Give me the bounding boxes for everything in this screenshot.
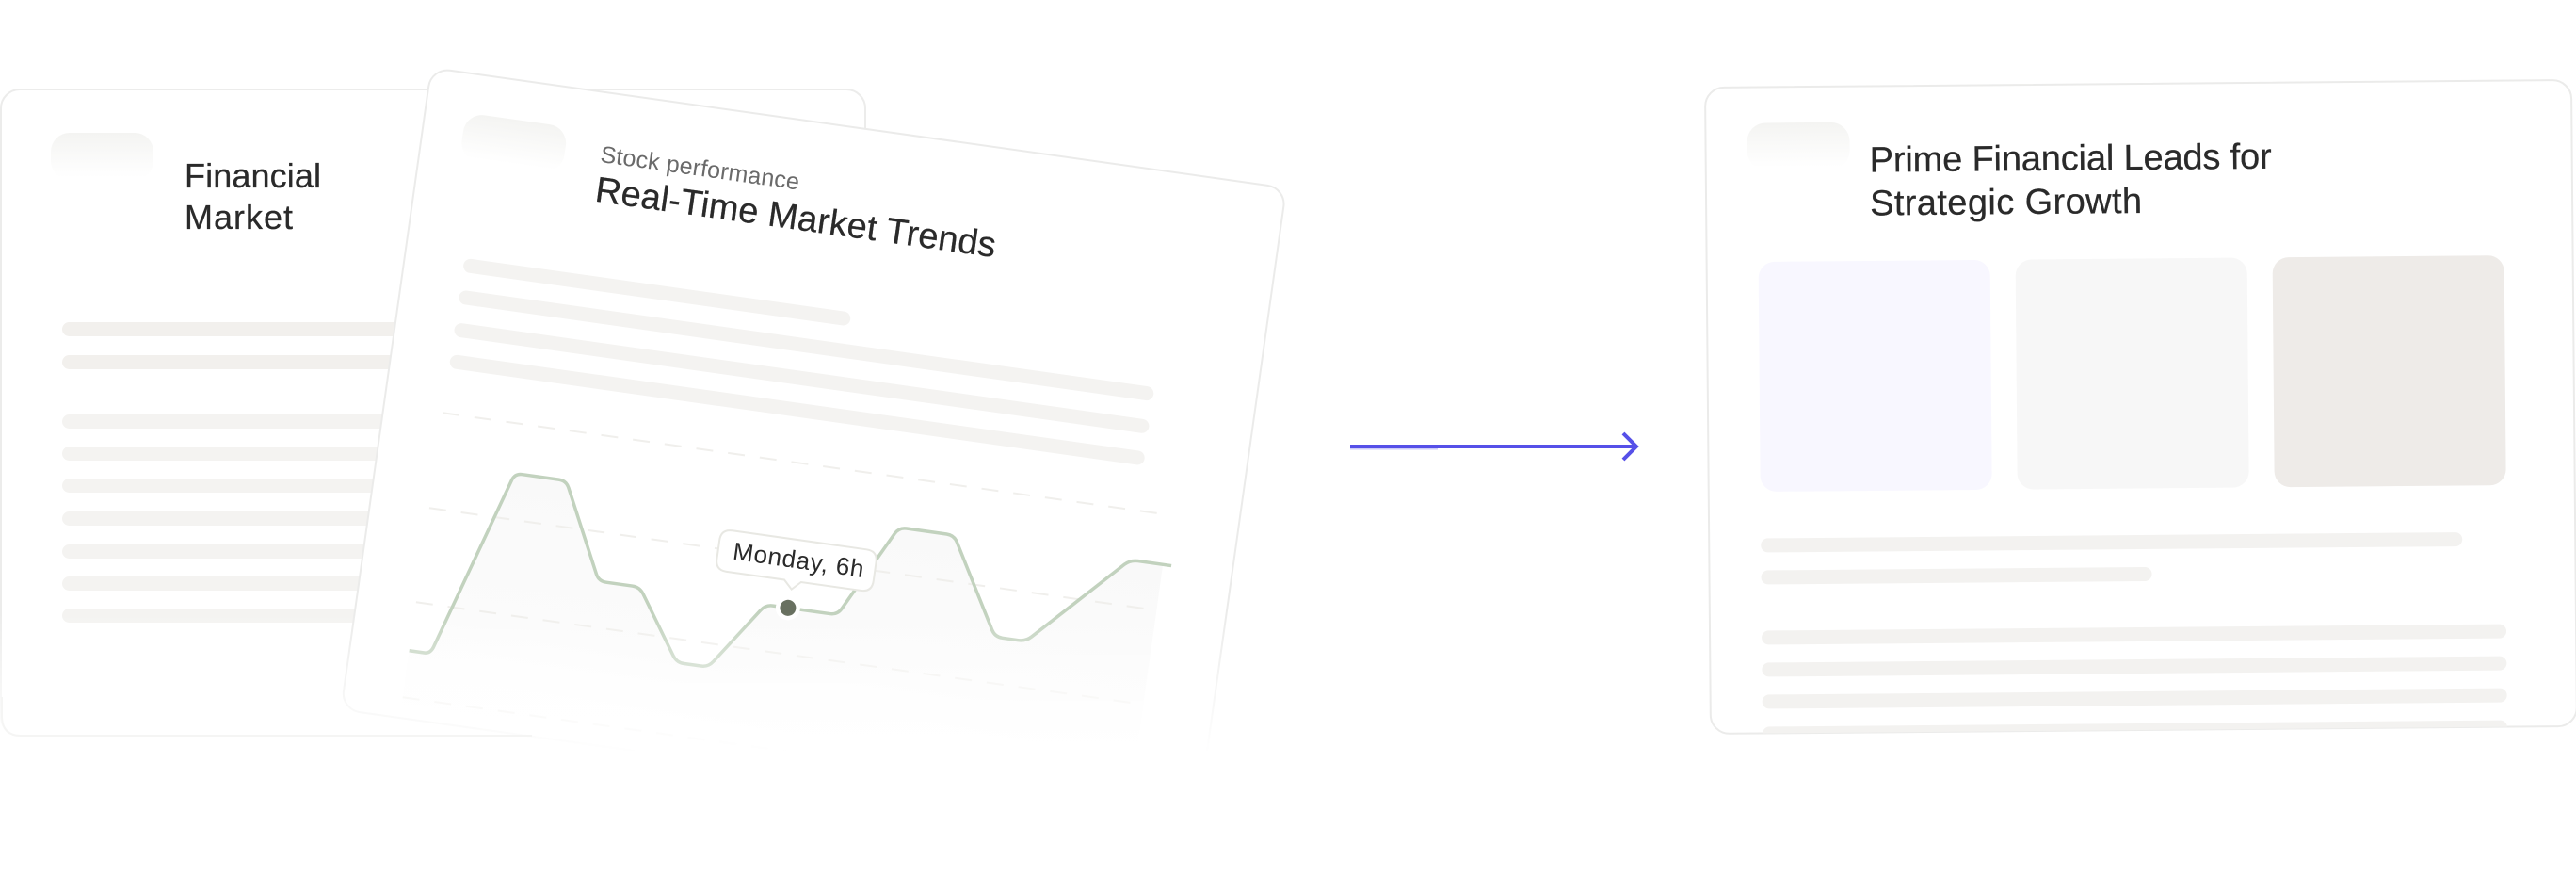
data point marker [774, 594, 802, 622]
heading: Financial Market: Market [185, 198, 293, 236]
heading: Prime Financial Leads for Strategic Growth: Strategic Growth [1870, 182, 2142, 223]
chart: market trend line [401, 413, 1178, 814]
icon placeholder: trends logo [459, 113, 569, 173]
panel: Financial Market card [1, 89, 865, 736]
tooltip: Monday, 6h: Monday, 6h [732, 537, 866, 583]
heading: Prime Financial Leads for Strategic Growth [1869, 138, 2273, 223]
tile: warm grey [2273, 255, 2506, 487]
tile: light grey [2016, 257, 2249, 490]
left card lower edge [2, 697, 532, 736]
heading: Real-Time Market Trends: Real-Time Market Trends [593, 170, 998, 266]
icon placeholder: leads logo [1747, 122, 1850, 170]
infographic canvas [0, 70, 2576, 737]
text placeholder lines [62, 322, 804, 623]
chart area fill [401, 463, 1163, 813]
chart line [410, 463, 1171, 755]
icon placeholder: Financial Market logo [51, 133, 153, 180]
heading: Prime Financial Leads for Strategic Growth: Prime Financial Leads for [1869, 138, 2272, 180]
tile: lavender [1759, 260, 1992, 492]
bottom fade over the left cards [0, 612, 1685, 893]
chart grid lines [403, 413, 1172, 800]
text placeholder lines [1761, 532, 2507, 740]
tooltip: Monday, 6h [714, 529, 877, 600]
text placeholder lines [449, 258, 1159, 465]
panel: Prime Financial Leads card [1705, 80, 2576, 741]
panel: Real-Time Market Trends card [341, 68, 1286, 830]
arrow: transformation to leads [1350, 433, 1636, 460]
heading: Financial Market: Financial [185, 156, 321, 195]
subheading: Stock performance: Stock performance [599, 141, 801, 195]
heading: Financial Market [185, 156, 321, 236]
